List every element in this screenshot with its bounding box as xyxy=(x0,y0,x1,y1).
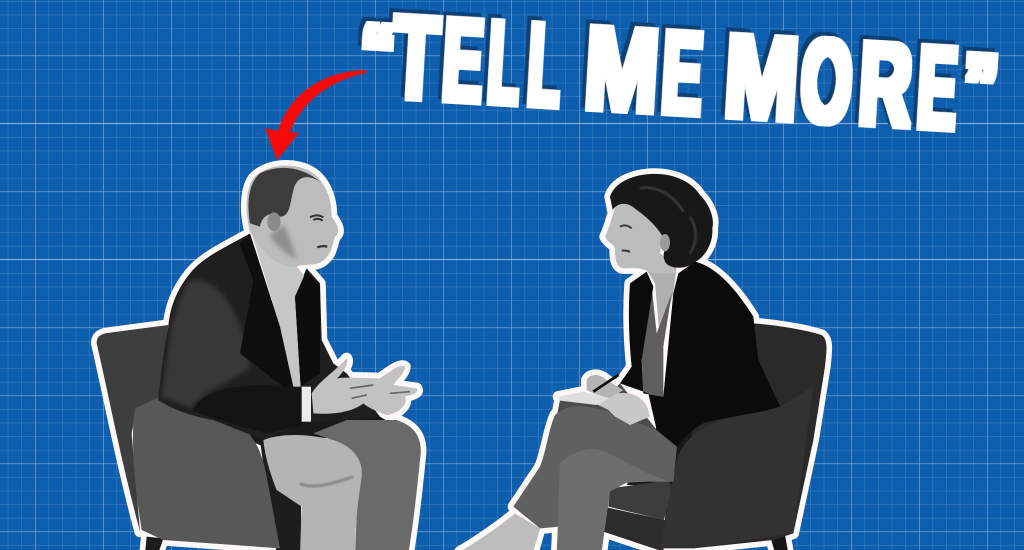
title: tell me more: E xyxy=(915,21,960,155)
title: tell me more: M xyxy=(721,10,802,146)
title: tell me more: “ xyxy=(357,7,398,98)
title: tell me more xyxy=(356,0,1002,158)
title: tell me more: L xyxy=(525,0,563,132)
man white cutout outline xyxy=(97,166,421,550)
man figure and chair xyxy=(97,166,421,550)
title: tell me more: L xyxy=(485,0,523,130)
red arrow pointing at the man's head xyxy=(265,70,366,160)
title: tell me more: ” xyxy=(960,36,1001,138)
woman figure and chair xyxy=(460,174,826,550)
woman white cutout outline xyxy=(460,174,826,550)
title: tell me more: M xyxy=(581,2,663,138)
man seated in armchair xyxy=(97,166,421,550)
title: tell me more: O xyxy=(798,15,855,149)
title: tell me more: R xyxy=(856,18,915,153)
title: tell me more: E xyxy=(659,7,706,141)
woman seated in armchair taking notes xyxy=(460,174,826,550)
